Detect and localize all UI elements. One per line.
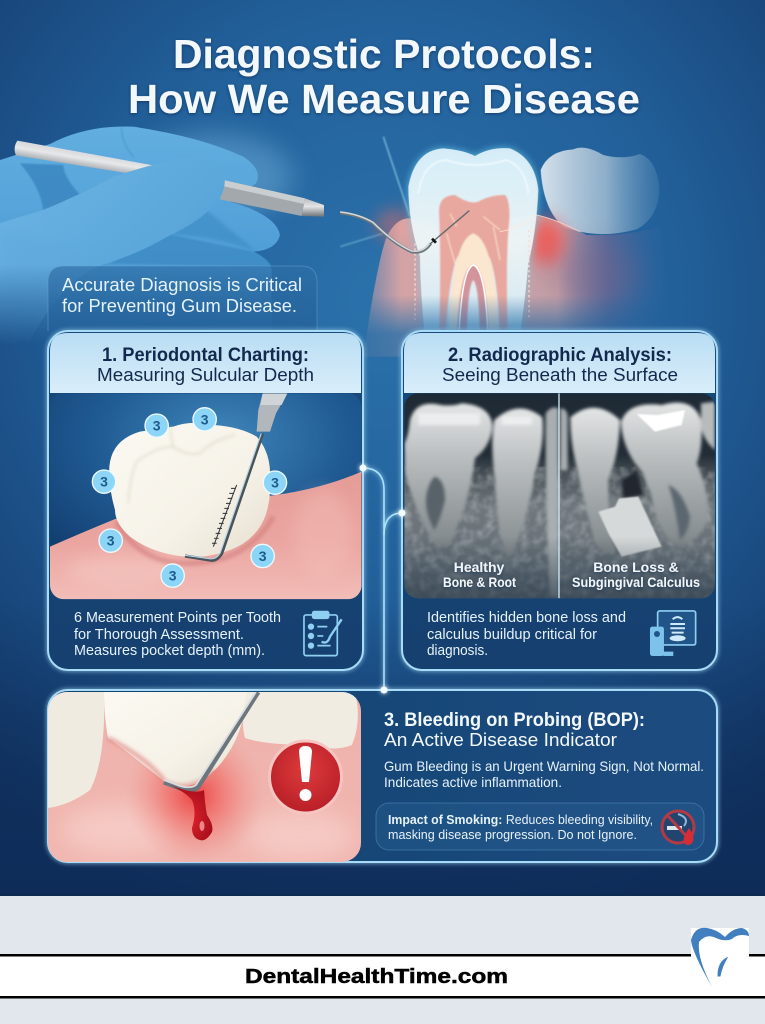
diseased teeth xyxy=(560,408,568,470)
instrument handle xyxy=(14,140,152,173)
illustration: tooth with probe and measurement points xyxy=(50,393,362,599)
panel 1 description: for Thorough Assessment. xyxy=(74,627,244,643)
x-ray labels xyxy=(443,559,700,590)
x-ray labels: Bone Loss & xyxy=(593,559,679,575)
x-ray comparison image xyxy=(404,393,715,598)
panel 3 description xyxy=(384,758,704,790)
footer website text: DentalHealthTime.com xyxy=(245,966,508,988)
title: Diagnostic Protocols: xyxy=(173,31,595,77)
callout: impact of smoking: Impact of Smoking: Reduces bleeding visibility, xyxy=(388,812,653,827)
main tooth xyxy=(408,148,538,357)
probe tip xyxy=(340,213,431,252)
panel 2 description: diagnosis. xyxy=(427,643,488,659)
second tooth, faded xyxy=(541,148,659,234)
callout: accurate diagnosis: for Preventing Gum Disease. xyxy=(62,296,297,316)
callout: impact of smoking: masking disease progression. Do not Ignore. xyxy=(388,827,637,842)
connector nodes xyxy=(360,464,406,694)
callout: accurate diagnosis: Accurate Diagnosis is Critical xyxy=(62,275,302,295)
measurement points: 3 xyxy=(259,548,267,564)
panel 3 heading: 3. Bleeding on Probing (BOP): xyxy=(384,710,645,731)
crown xyxy=(109,423,270,557)
callout: accurate diagnosis xyxy=(48,266,317,331)
footer band xyxy=(0,896,765,1024)
callout: impact of smoking xyxy=(376,803,704,850)
icon: warning xyxy=(270,741,342,813)
illustration: cross-section tooth with probe xyxy=(340,137,677,357)
measurement points: 3 xyxy=(153,418,161,434)
title xyxy=(128,31,640,122)
panel 2 description: Identifies hidden bone loss and xyxy=(427,610,626,626)
measurement points: 3 xyxy=(271,475,279,491)
measurement points: 3 xyxy=(201,411,209,427)
panel: bleeding on probing xyxy=(48,690,717,862)
panel 1 description: Measures pocket depth (mm). xyxy=(74,643,265,659)
icon: x-ray monitor xyxy=(650,611,696,656)
panel 2 heading: Seeing Beneath the Surface xyxy=(442,364,678,385)
measurement points: 3 xyxy=(169,568,177,584)
panel 2 heading xyxy=(404,333,715,393)
x-ray labels: Healthy xyxy=(454,559,504,575)
bleeding illustration xyxy=(48,692,361,862)
probe xyxy=(257,393,287,432)
panel 3 heading xyxy=(384,710,645,750)
panel 3 heading: An Active Disease Indicator xyxy=(384,729,617,750)
panel 2 description xyxy=(427,610,626,659)
gums xyxy=(363,215,677,357)
measurement points xyxy=(92,408,287,587)
title: How We Measure Disease xyxy=(128,76,640,122)
panel 3 description: Gum Bleeding is an Urgent Warning Sign, Not Normal. xyxy=(384,758,704,774)
panel: radiographic analysis xyxy=(402,331,717,670)
panel 1 heading: 1. Periodontal Charting: xyxy=(102,345,309,366)
illustration: gloved hand holding probe xyxy=(0,126,324,360)
blood drop xyxy=(170,785,212,840)
measurement points: 3 xyxy=(107,533,115,549)
panel 1 heading: Measuring Sulcular Depth xyxy=(97,364,314,385)
x-ray labels: Bone & Root xyxy=(443,574,516,590)
healthy teeth xyxy=(404,403,492,547)
panel 1 heading xyxy=(50,333,361,393)
measurement points: 3 xyxy=(100,474,108,490)
icon: clipboard xyxy=(304,612,342,656)
logo: tooth xyxy=(691,928,749,987)
connector lines xyxy=(363,468,402,690)
panel 2 description: calculus buildup critical for xyxy=(427,627,597,643)
icon: no smoking xyxy=(662,811,694,845)
panel 3 description: Indicates active inflammation. xyxy=(384,774,562,790)
panel 1 description xyxy=(74,610,281,659)
x-ray labels: Subgingival Calculus xyxy=(572,574,700,590)
panel 2 heading: 2. Radiographic Analysis: xyxy=(448,345,672,366)
gum xyxy=(50,472,362,599)
panel: periodontal charting xyxy=(48,331,363,670)
pulp chamber xyxy=(438,194,510,330)
panel 1 description: 6 Measurement Points per Tooth xyxy=(74,610,281,626)
